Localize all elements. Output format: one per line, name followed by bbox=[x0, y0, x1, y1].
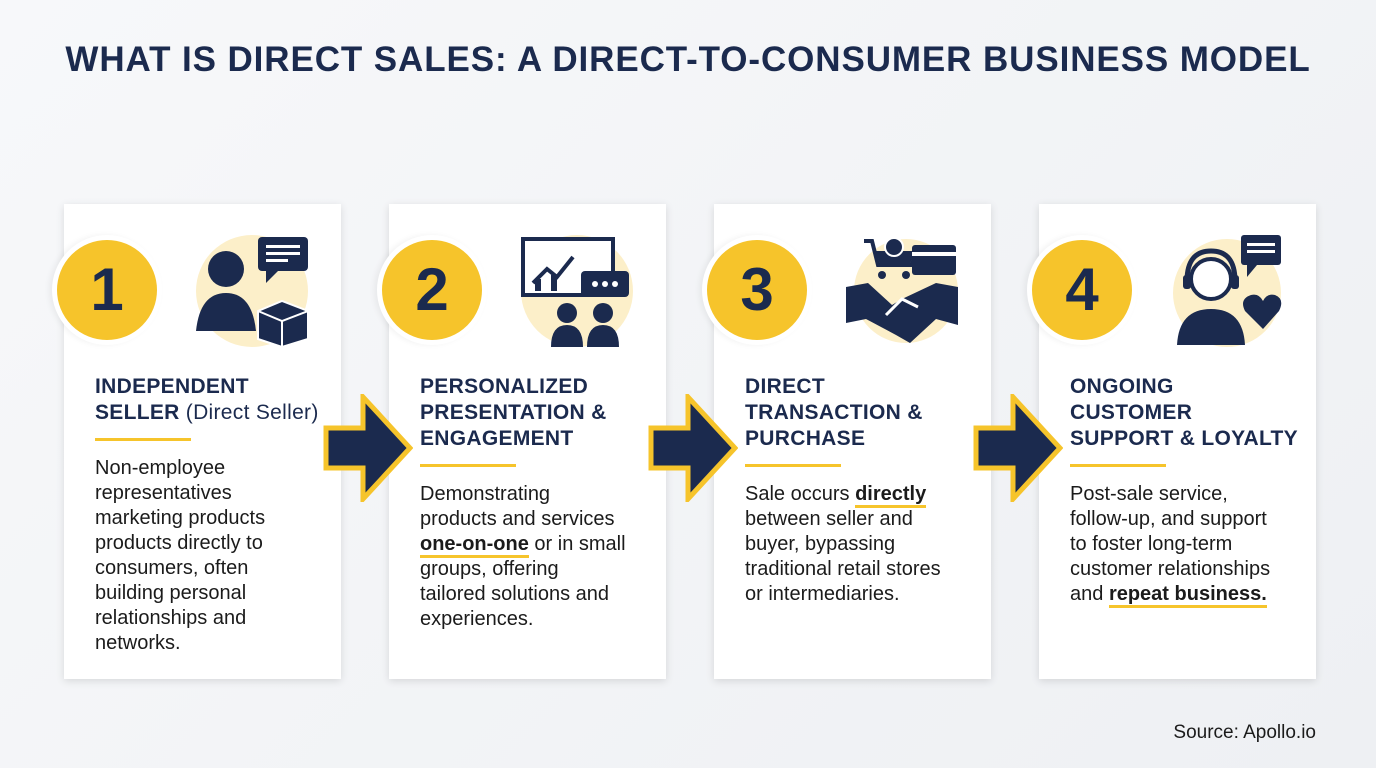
body text: marketing products bbox=[95, 507, 265, 529]
icon: seller with box bbox=[196, 235, 308, 347]
heading: PURCHASE bbox=[745, 427, 865, 450]
body text: follow-up, and support bbox=[1070, 508, 1267, 530]
heading: SUPPORT & LOYALTY bbox=[1070, 427, 1298, 450]
heading: TRANSACTION & bbox=[745, 401, 923, 424]
panel: step 3 bbox=[714, 204, 991, 679]
heading: INDEPENDENT bbox=[95, 375, 249, 398]
heading: SELLER (Direct Seller) bbox=[95, 401, 319, 424]
heading bbox=[1070, 375, 1298, 450]
number 2: 2 bbox=[415, 256, 449, 323]
number 2 bbox=[377, 235, 487, 345]
body text bbox=[745, 483, 941, 605]
body text: consumers, often bbox=[95, 557, 248, 579]
number 4: 4 bbox=[1065, 256, 1099, 323]
heading: PRESENTATION & bbox=[420, 401, 607, 424]
heading bbox=[745, 375, 923, 450]
title: WHAT IS DIRECT SALES: A DIRECT-TO-CONSUMER BUSINESS MODEL bbox=[65, 40, 1311, 79]
body text: Sale occurs directly bbox=[745, 483, 926, 505]
body text: traditional retail stores bbox=[745, 558, 941, 580]
body text: between seller and bbox=[745, 508, 913, 530]
icon: cart handshake bbox=[846, 239, 958, 343]
body text: buyer, bypassing bbox=[745, 533, 895, 555]
body text: experiences. bbox=[420, 608, 533, 630]
heading: ENGAGEMENT bbox=[420, 427, 574, 450]
arrow 3 bbox=[974, 394, 1063, 502]
body text: or intermediaries. bbox=[745, 583, 900, 605]
body text: Non-employee bbox=[95, 457, 225, 479]
heading: CUSTOMER bbox=[1070, 401, 1192, 424]
panel: step 2 bbox=[389, 204, 666, 679]
heading: PERSONALIZED bbox=[420, 375, 588, 398]
number 3 bbox=[702, 235, 812, 345]
body text bbox=[1070, 483, 1270, 608]
body text: relationships and bbox=[95, 607, 246, 629]
body text: products and services bbox=[420, 508, 615, 530]
arrow 2 bbox=[648, 394, 738, 502]
body text: representatives bbox=[95, 482, 232, 504]
body text: Post-sale service, bbox=[1070, 483, 1228, 505]
body text: networks. bbox=[95, 632, 181, 654]
body text: and repeat business. bbox=[1070, 583, 1267, 605]
heading: DIRECT bbox=[745, 375, 825, 398]
icon: presentation bbox=[521, 235, 633, 347]
body text: groups, offering bbox=[420, 558, 559, 580]
heading bbox=[95, 375, 319, 424]
number 1 bbox=[52, 235, 162, 345]
body text bbox=[95, 457, 265, 654]
heading bbox=[420, 375, 607, 450]
number 4 bbox=[1027, 235, 1137, 345]
panel: step 1 bbox=[64, 204, 341, 679]
body text: building personal bbox=[95, 582, 246, 604]
body text: Demonstrating bbox=[420, 483, 550, 505]
panel: step 4 bbox=[1039, 204, 1316, 679]
source: Source: Apollo.io bbox=[1173, 722, 1316, 743]
body text bbox=[420, 483, 626, 630]
body text: customer relationships bbox=[1070, 558, 1270, 580]
number 3: 3 bbox=[740, 256, 774, 323]
arrow 1 bbox=[324, 394, 413, 502]
heading: ONGOING bbox=[1070, 375, 1174, 398]
body text: tailored solutions and bbox=[420, 583, 609, 605]
icon: support agent bbox=[1173, 235, 1282, 347]
body text: to foster long-term bbox=[1070, 533, 1232, 555]
body text: products directly to bbox=[95, 532, 263, 554]
number 1: 1 bbox=[90, 256, 124, 323]
body text: one-on-one or in small bbox=[420, 533, 626, 555]
